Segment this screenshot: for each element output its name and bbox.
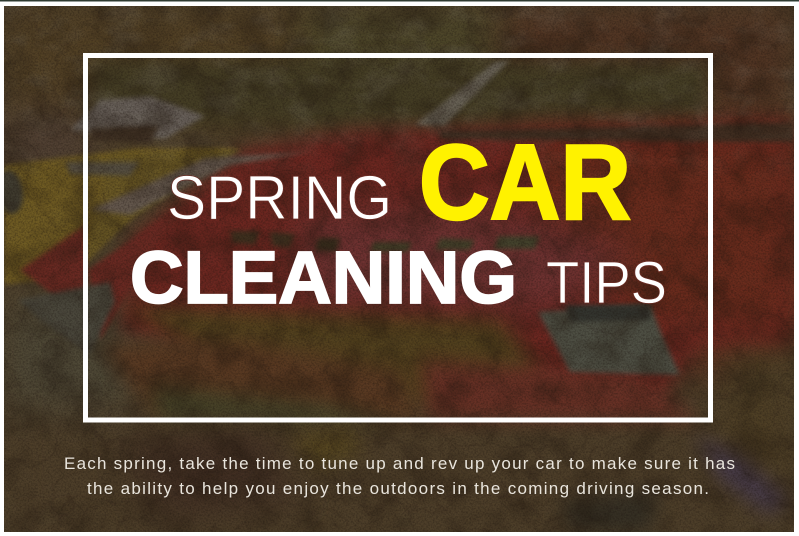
title word: TIPS: TIPS: [546, 250, 667, 316]
grey stripes: [66, 162, 140, 176]
title word: SPRING: SPRING: [167, 164, 392, 233]
dark trim line: [440, 122, 794, 142]
red car body: [120, 120, 794, 400]
left side grey sill: [24, 282, 116, 335]
purple paint fleck: [700, 438, 786, 516]
lower olive and orange side bands: [137, 304, 532, 388]
dark bottom wash: [137, 428, 284, 514]
bonnet vents: [230, 231, 260, 245]
intro paragraph: the ability to help you enjoy the outdoors in the coming driving season.: [87, 479, 709, 498]
top edge line: [0, 0, 799, 2]
intro paragraph: [64, 454, 735, 498]
title: [130, 122, 667, 319]
texture: [4, 6, 794, 148]
intro paragraph: Each spring, take the time to tune up and rev up your car to make sure it has: [64, 454, 735, 473]
windscreen glare: [415, 60, 510, 125]
olive upper body: [96, 62, 708, 120]
title word: CAR: CAR: [419, 122, 631, 242]
title word: CLEANING: CLEANING: [130, 236, 517, 319]
yellow bottom patch: [315, 440, 343, 454]
windscreen grey wedge: [70, 96, 205, 139]
white frame: [86, 56, 710, 420]
grey-green side panel: [538, 304, 680, 375]
yellow left panel: [4, 148, 240, 285]
dark fender shape: [4, 169, 25, 216]
